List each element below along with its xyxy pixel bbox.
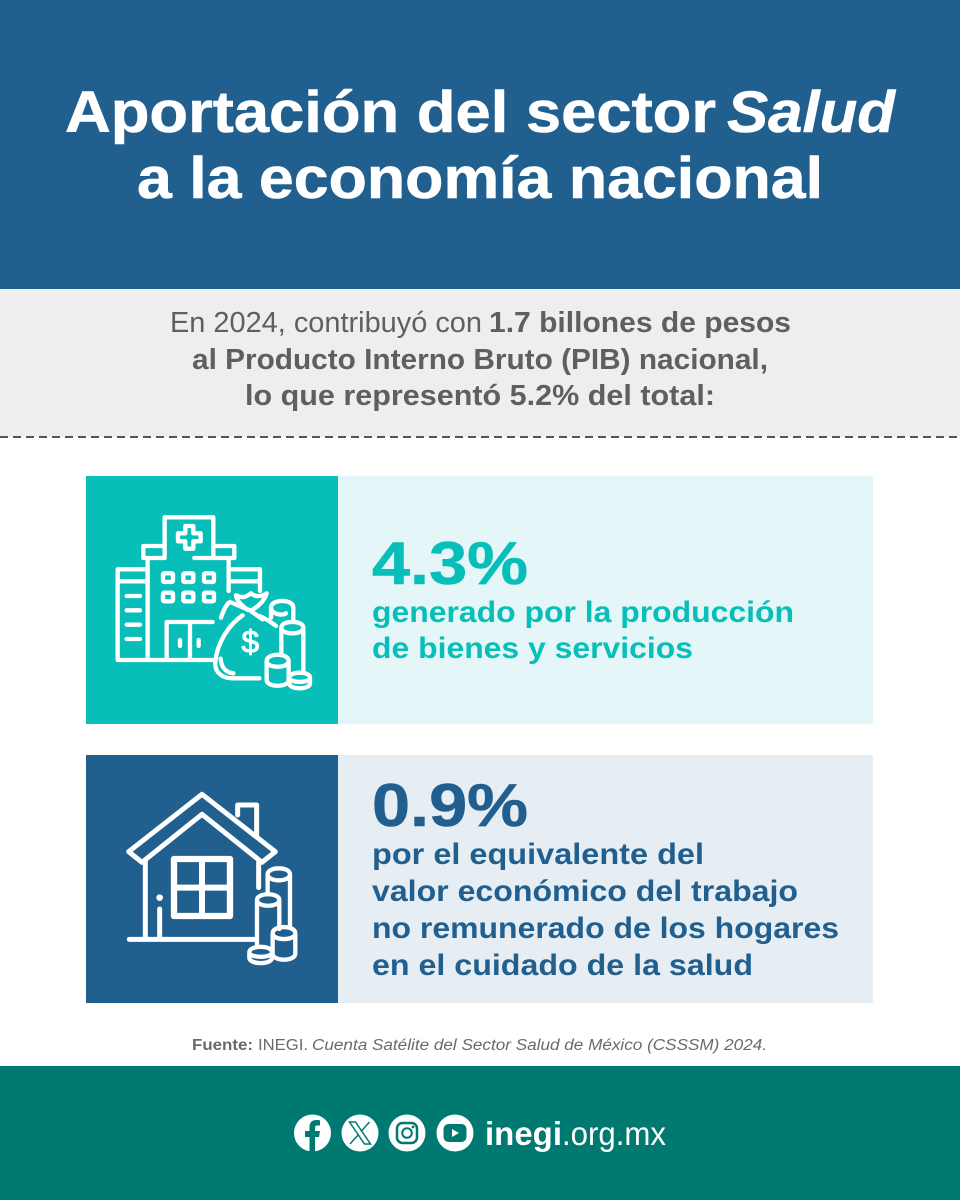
icon: facebook — [294, 1114, 331, 1152]
title: Salud — [727, 80, 897, 145]
icon: instagram — [388, 1114, 426, 1152]
intro text: al Producto Interno Bruto (PIB) nacional, — [192, 344, 768, 376]
source note: INEGI. — [258, 1037, 308, 1054]
stat description — [372, 838, 839, 982]
intro band — [0, 289, 960, 437]
panel: producción de bienes y servicios — [86, 476, 873, 724]
stat description: generado por la producción — [372, 596, 794, 629]
intro text — [170, 307, 791, 412]
icon: X — [342, 1114, 378, 1152]
website — [485, 1116, 666, 1153]
icon: hospital and money bag: $ — [242, 624, 260, 660]
footer band — [0, 1066, 960, 1200]
stat description: por el equivalente del — [372, 838, 704, 871]
website: .org.mx — [562, 1116, 666, 1153]
stat description: valor económico del trabajo — [372, 875, 798, 908]
stat description: no remunerado de los hogares — [372, 912, 839, 945]
intro text: En 2024, contribuyó con — [170, 307, 482, 339]
intro text: 1.7 billones de pesos — [489, 307, 791, 339]
icon: youtube — [436, 1114, 474, 1152]
stat: 4.3%: 4.3% — [372, 530, 528, 597]
stat description: de bienes y servicios — [372, 632, 693, 665]
header band — [0, 0, 960, 289]
title — [65, 80, 897, 211]
stat description — [372, 596, 794, 665]
title: a la economía nacional — [137, 146, 823, 211]
title: Aportación del sector — [65, 80, 716, 145]
icon: house and coins — [129, 794, 295, 963]
icon: hospital and money bag — [118, 517, 310, 688]
website: inegi — [485, 1116, 562, 1153]
stat: 0.9%: 0.9% — [372, 772, 528, 839]
intro text: lo que representó 5.2% del total: — [245, 380, 715, 412]
stat description: en el cuidado de la salud — [372, 949, 753, 982]
source note: Fuente: — [192, 1037, 253, 1054]
source note: Cuenta Satélite del Sector Salud de México (CSSSM) 2024. — [312, 1037, 767, 1054]
panel: trabajo no remunerado — [86, 755, 873, 1003]
